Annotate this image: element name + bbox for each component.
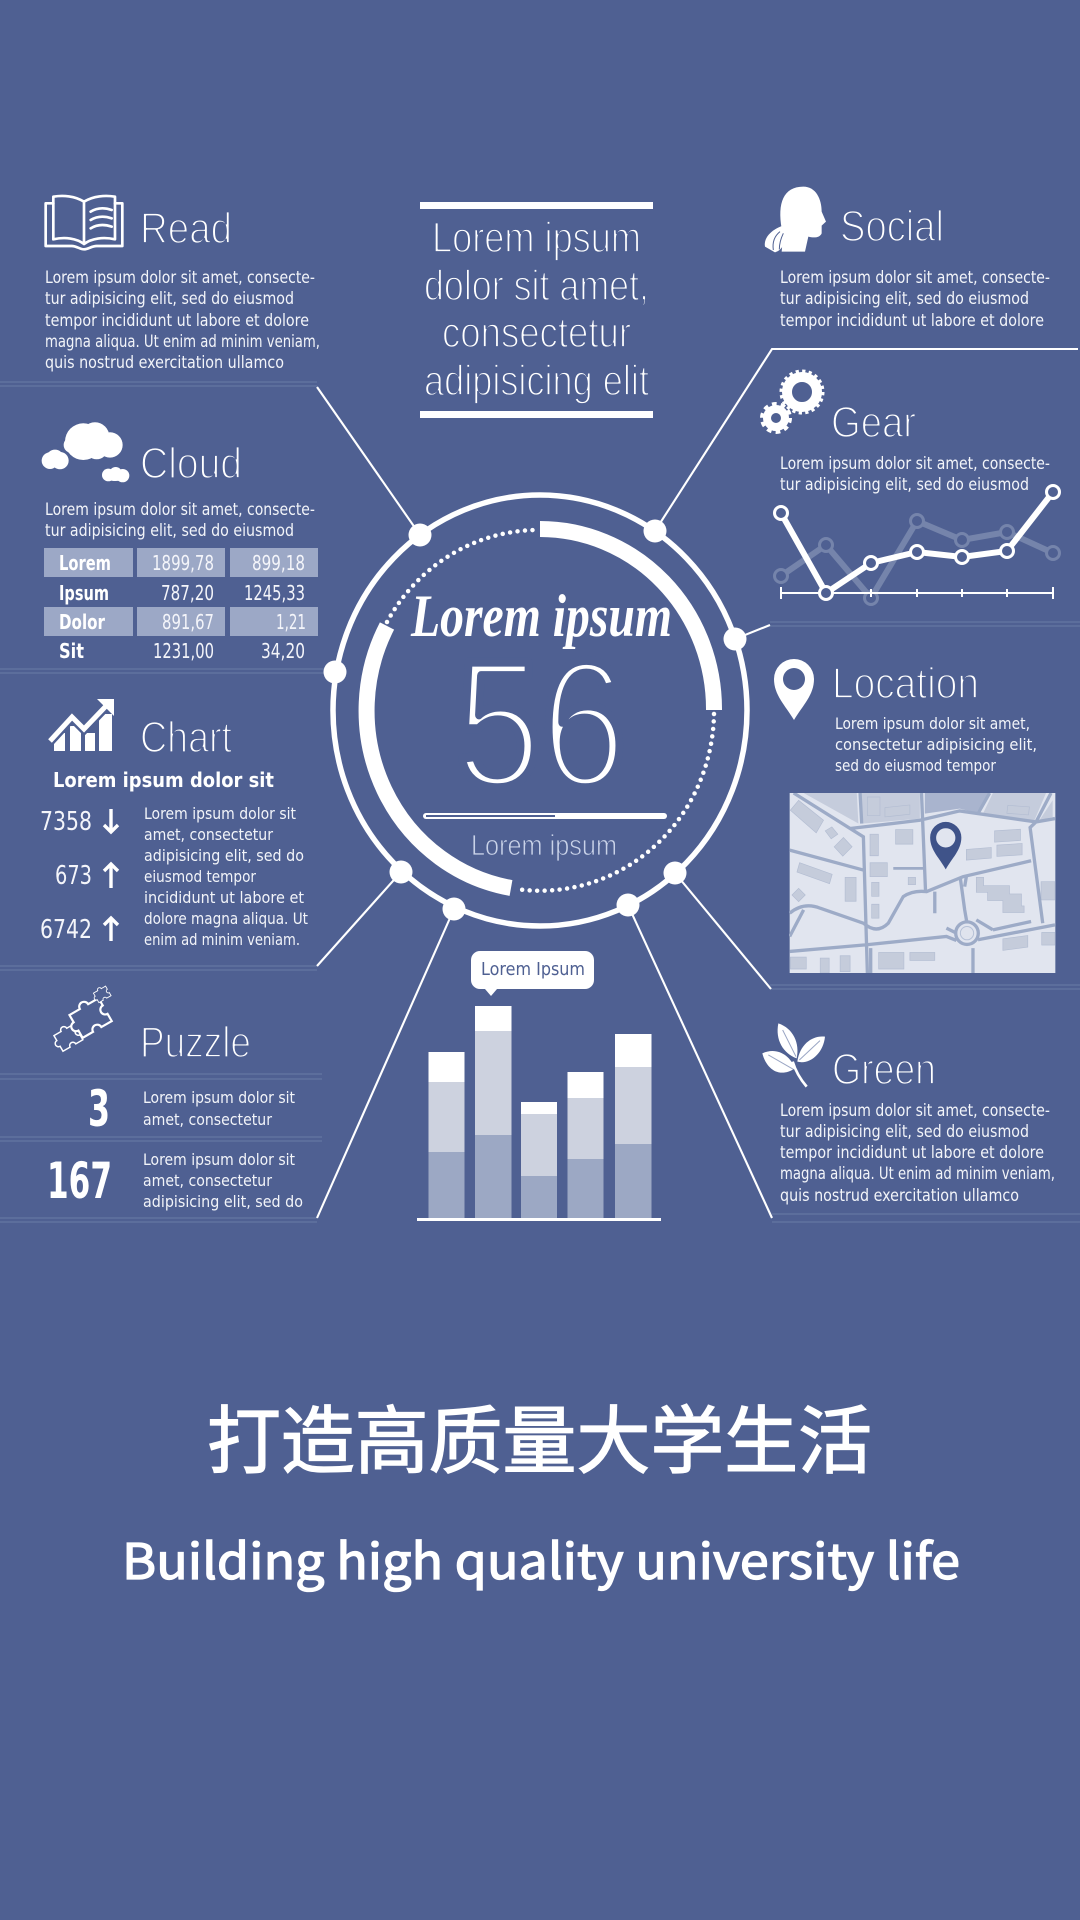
heading: read: Read bbox=[140, 204, 232, 253]
main title: English: Building high quality university life bbox=[122, 1523, 960, 1594]
table: 1899,78 bbox=[152, 551, 214, 575]
thick arcs bbox=[367, 529, 714, 888]
stat: 3: 3 bbox=[88, 1080, 110, 1138]
text: chart body: eiusmod tempor bbox=[144, 867, 256, 886]
bar chart bbox=[417, 951, 661, 1221]
stats: numbers with arrows bbox=[40, 807, 118, 945]
panel: cloud bbox=[42, 422, 318, 663]
title block: Lorem ipsum bbox=[432, 214, 641, 262]
icon: head silhouette bbox=[765, 187, 826, 252]
subheading: chart: Lorem ipsum dolor sit bbox=[53, 768, 274, 792]
script heading: Lorem ipsum bbox=[410, 583, 672, 649]
outer ring bbox=[333, 495, 747, 926]
table: 1,21 bbox=[276, 610, 306, 634]
text: green body bbox=[780, 1101, 1055, 1205]
title block: dolor sit amet, bbox=[424, 262, 649, 310]
icon: gears bbox=[762, 372, 822, 432]
text: read body: Lorem ipsum dolor sit amet, consecte- bbox=[45, 268, 315, 287]
text: puzzle row 1: Lorem ipsum dolor sit bbox=[143, 1088, 295, 1107]
table: Sit bbox=[59, 639, 84, 663]
line chart bbox=[774, 486, 1060, 604]
axis bbox=[417, 1218, 661, 1221]
text: social body: tempor incididunt ut labore et dolore bbox=[780, 311, 1044, 330]
stat: 167: 167 bbox=[47, 1152, 112, 1210]
bubble label: Lorem Ipsum bbox=[481, 959, 585, 980]
stats: numbers with arrows: 673 bbox=[55, 861, 92, 891]
gauge caption: Lorem ipsum bbox=[471, 830, 617, 862]
stats: numbers with arrows: 6742 bbox=[40, 915, 92, 945]
progress bar bbox=[423, 813, 667, 819]
text: green body: quis nostrud exercitation ullamco bbox=[780, 1186, 1019, 1205]
table bbox=[44, 548, 318, 663]
text: chart body: adipisicing elit, sed do bbox=[144, 846, 304, 865]
text: location body bbox=[835, 714, 1037, 775]
heading: puzzle: Puzzle bbox=[140, 1018, 251, 1067]
connector lines bbox=[317, 349, 1078, 1218]
text: green body: tempor incididunt ut labore et dolore bbox=[780, 1143, 1044, 1162]
dotted arcs bbox=[387, 530, 714, 891]
heading: social: Social bbox=[840, 202, 944, 251]
text: cloud body bbox=[45, 500, 315, 540]
big number: 56 bbox=[456, 624, 626, 825]
panel: social bbox=[765, 187, 1050, 330]
table: Lorem bbox=[59, 551, 111, 575]
stats: numbers with arrows: 7358 bbox=[40, 807, 92, 837]
icon: rising chart bbox=[50, 699, 114, 751]
bubble label bbox=[471, 951, 594, 996]
map bbox=[789, 793, 1056, 973]
panel: read bbox=[45, 196, 320, 372]
text: puzzle row 2: adipisicing elit, sed do bbox=[143, 1192, 303, 1211]
icon: book bbox=[46, 196, 122, 249]
map pin bbox=[930, 822, 961, 869]
text: gear body: tur adipisicing elit, sed do eiusmod bbox=[780, 475, 1029, 494]
table: 34,20 bbox=[261, 639, 305, 663]
text: read body: magna aliqua. Ut enim ad minim veniam, bbox=[45, 332, 320, 351]
panel: puzzle bbox=[47, 984, 303, 1211]
nodes bbox=[324, 520, 746, 920]
text: read body: quis nostrud exercitation ullamco bbox=[45, 353, 284, 372]
table: 1245,33 bbox=[244, 581, 305, 605]
text: read body: tempor incididunt ut labore et dolore bbox=[45, 311, 309, 330]
text: location body: consectetur adipisicing elit, bbox=[835, 735, 1037, 754]
text: cloud body: Lorem ipsum dolor sit amet, consecte- bbox=[45, 500, 315, 519]
text: social body: tur adipisicing elit, sed do eiusmod bbox=[780, 289, 1029, 308]
text: chart body: amet, consectetur bbox=[144, 825, 273, 844]
heading: location: Location bbox=[832, 659, 979, 708]
text: location body: sed do eiusmod tempor bbox=[835, 756, 996, 775]
heading: chart: Chart bbox=[140, 713, 232, 762]
title block bbox=[420, 202, 653, 418]
text: social body bbox=[780, 268, 1050, 330]
table: Ipsum bbox=[59, 581, 109, 605]
text: puzzle row 2: Lorem ipsum dolor sit bbox=[143, 1150, 295, 1169]
main title: Chinese: 打造高质量大学生活 bbox=[207, 1400, 872, 1483]
panel: green bbox=[762, 1023, 1055, 1205]
text: location body: Lorem ipsum dolor sit amet, bbox=[835, 714, 1030, 733]
icon: clouds bbox=[42, 422, 129, 482]
panel: chart bbox=[40, 699, 308, 949]
text: puzzle row 2 bbox=[143, 1150, 303, 1211]
table: 1231,00 bbox=[153, 639, 214, 663]
text: green body: tur adipisicing elit, sed do eiusmod bbox=[780, 1122, 1029, 1141]
heading: gear: Gear bbox=[831, 398, 916, 447]
text: read body: tur adipisicing elit, sed do eiusmod bbox=[45, 289, 294, 308]
panel: gear bbox=[762, 372, 1060, 604]
text: gear body bbox=[780, 454, 1050, 494]
text: chart body: incididunt ut labore et bbox=[144, 888, 304, 907]
text: puzzle row 1: amet, consectetur bbox=[143, 1110, 272, 1129]
title block: consectetur bbox=[442, 309, 631, 357]
title block: adipisicing elit bbox=[424, 357, 649, 405]
text: read body bbox=[45, 268, 320, 372]
text: puzzle row 2: amet, consectetur bbox=[143, 1171, 272, 1190]
text: chart body: enim ad minim veniam. bbox=[144, 930, 300, 949]
table: 891,67 bbox=[162, 610, 214, 634]
central gauge bbox=[324, 495, 747, 926]
icon: puzzle pieces bbox=[49, 984, 112, 1053]
icon: leaves bbox=[762, 1023, 825, 1087]
table: 787,20 bbox=[161, 581, 214, 605]
text: cloud body: tur adipisicing elit, sed do eiusmod bbox=[45, 521, 294, 540]
table: 899,18 bbox=[252, 551, 305, 575]
table: Dolor bbox=[59, 610, 105, 634]
text: puzzle row 1 bbox=[143, 1088, 295, 1129]
panel: location bbox=[774, 659, 1055, 973]
heading: green: Green bbox=[832, 1045, 936, 1094]
icon: location pin bbox=[774, 659, 814, 720]
heading: cloud: Cloud bbox=[140, 439, 242, 488]
text: chart body: Lorem ipsum dolor sit bbox=[144, 804, 296, 823]
text: chart body: dolore magna aliqua. Ut bbox=[144, 909, 308, 928]
text: chart body bbox=[144, 804, 308, 949]
bars bbox=[428, 1006, 652, 1218]
